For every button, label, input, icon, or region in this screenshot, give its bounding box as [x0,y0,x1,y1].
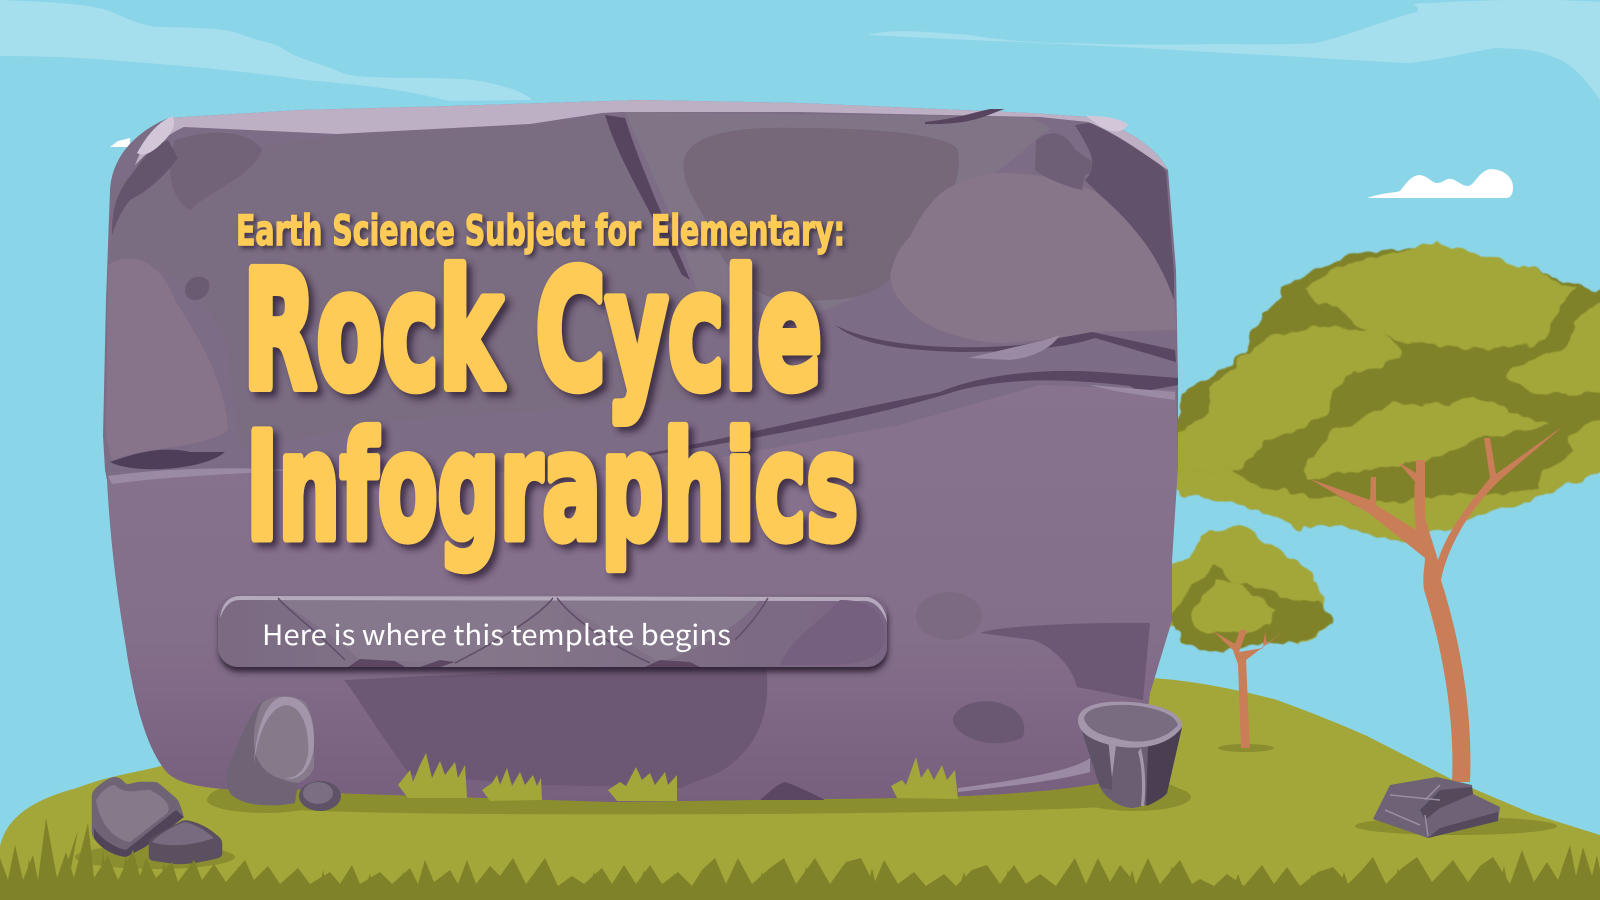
small tree shadow [1218,744,1274,752]
tall boulder shadow [207,787,323,813]
gray central panel [625,112,1050,320]
tuft 3 [608,767,677,801]
lower dark band left [344,660,767,788]
stump top face [1084,705,1178,742]
cloud streak: upper left [0,0,532,101]
top-left corner light [137,116,174,155]
stump dark side [1146,727,1182,806]
white cloud: right [1367,169,1513,198]
pair shadow [75,845,235,869]
stump left facet [1080,725,1112,790]
pair front rock top [152,822,214,845]
plaque lower shade [348,659,700,667]
stone slab [103,100,1178,802]
top-left corner shade [112,140,178,235]
top crack [605,115,690,280]
small canopy [1158,525,1332,652]
tall boulder upper tone [254,696,314,783]
upper-left shaded panel [106,112,1177,788]
darker upper blob [683,128,959,300]
flat boulder shadow [1355,817,1557,835]
pair front rock [149,820,222,864]
plaque body [218,595,887,667]
bottom-right light lip [958,758,1090,792]
pebble top [303,782,333,804]
stump shadow [1077,783,1191,811]
upper left mid patch [170,133,262,210]
base shadow blocks [760,782,825,800]
small white cloud behind rock [110,138,130,147]
notch between blocks [110,450,225,469]
upper-right dark facet [1075,122,1174,300]
lower block [108,385,1178,802]
stump body [1078,720,1182,808]
plaque text: Here is where this template begins [262,614,731,654]
stump light strips [1108,738,1145,806]
tall boulder highlight [254,697,314,779]
tall boulder body [226,696,314,805]
pair back rock shade [94,810,184,857]
pair back rock light [96,785,169,842]
top highlight band [135,100,1168,170]
rock: left stacked pair [75,777,235,869]
small branches over canopy [1213,630,1285,664]
tuft 1 [398,753,467,798]
left light panel [106,258,228,460]
title line 1: Rock Cycle [243,238,822,426]
lower dark band right [980,623,1150,700]
grass hill [0,678,1600,900]
pit: lower right [953,701,1024,743]
canopy: lower rim foliage [1173,416,1600,540]
pill-shaped stone plaque [218,595,887,667]
tuft 2 [482,768,542,801]
flat boulder body [1373,777,1500,838]
top-right crack [925,109,1005,124]
foreground grass strip [0,818,1600,900]
pair back rock [92,777,184,857]
canopy: top foliage [1307,243,1575,349]
top-right corner light [1086,116,1128,131]
flat boulder highlights [1385,785,1440,836]
facet mid [1035,133,1095,190]
pebble [299,781,341,811]
flat boulder facets [1420,787,1498,838]
canopy: dark layer [1173,243,1600,540]
ground shadow under slab [208,775,1186,814]
slab silhouette [103,100,1178,802]
small acacia tree [1158,525,1332,752]
subtitle: Earth Science Subject for Elementary: [236,206,845,255]
rock: right flat boulder [1355,777,1557,838]
big acacia tree [1173,243,1600,782]
long crack: horizontal fissure [640,371,1178,457]
grass base spikes [0,818,1600,900]
canopy: right foliage [1507,295,1600,394]
rock: cup stump [1077,702,1191,811]
plaque lighter patches [280,600,760,662]
small canopy: front foliage [1190,579,1277,632]
pit: upper left [185,277,209,300]
light streak on right edge [1090,385,1175,400]
tuft 4 [891,757,958,799]
grass tufts at slab base [398,753,958,801]
grass thin blades [26,830,1548,885]
canopy foliage [1173,243,1600,540]
stump top rim [1078,702,1182,748]
plaque cracks [278,598,768,663]
long crack: upper band [835,325,1176,362]
small trunk [1213,630,1285,748]
canopy: mid-left foliage [1173,327,1401,472]
cloud streak: upper right [868,0,1600,100]
upper right light blob [890,173,1177,343]
rock: tall boulder [207,696,341,813]
small canopy: shade [1172,562,1332,652]
light facet on fissure [968,335,1060,360]
title line 2: Infographics [246,402,858,573]
pit: right of pill [916,592,982,640]
small canopy: foliage back [1158,525,1332,650]
trunk and branches [1310,426,1563,782]
plaque top rim [220,596,887,622]
light rim of lower block [108,468,300,484]
plaque right dark patch [780,600,885,665]
canopy: center foliage [1303,397,1550,479]
